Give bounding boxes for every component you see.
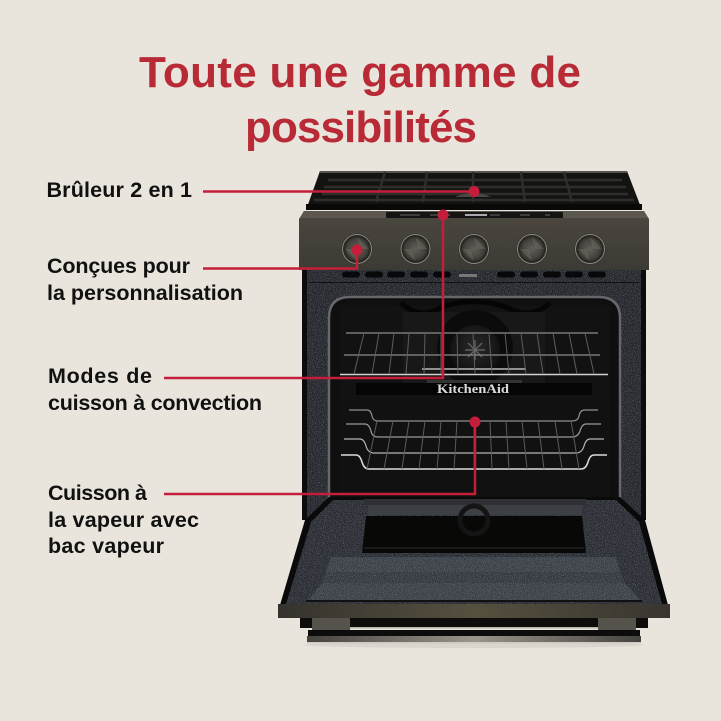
label: steam cooking [48, 416, 480, 558]
label: customisation: Conçues pour [47, 254, 191, 278]
KitchenAid brand bar [356, 380, 592, 396]
oven shadow [304, 642, 644, 648]
control knobs [342, 234, 606, 264]
door hinge and handle [300, 618, 648, 644]
title: Toute une gamme de [139, 48, 581, 97]
title: possibilités [245, 103, 477, 152]
label: convection modes: cuisson à convection [48, 391, 262, 415]
door top rim [364, 499, 586, 505]
control panel [299, 211, 649, 270]
label: steam cooking: Cuisson à [48, 481, 148, 505]
oven body [302, 270, 646, 520]
label: convection modes [48, 210, 448, 415]
label: customisation [47, 244, 362, 305]
label: burner [46, 178, 480, 202]
label: convection modes: Modes de [48, 364, 152, 388]
door inner steps [306, 557, 642, 601]
upper oven rack [340, 333, 608, 374]
label: burner: Brûleur 2 en 1 [46, 178, 192, 202]
label: steam cooking: la vapeur avec [48, 508, 199, 532]
cooktop with grates [306, 171, 642, 210]
label: customisation: la personnalisation [47, 281, 243, 305]
lower oven rack [341, 410, 607, 469]
title [139, 48, 581, 152]
door front edge [278, 604, 670, 618]
door window [362, 506, 586, 553]
KitchenAid brand bar: KitchenAid [437, 382, 509, 396]
open oven door [278, 497, 670, 618]
oven cavity [329, 297, 620, 505]
display strip [386, 212, 563, 218]
label: steam cooking: bac vapeur [48, 534, 165, 558]
oven range illustration [278, 171, 670, 648]
vent slots [342, 272, 606, 278]
